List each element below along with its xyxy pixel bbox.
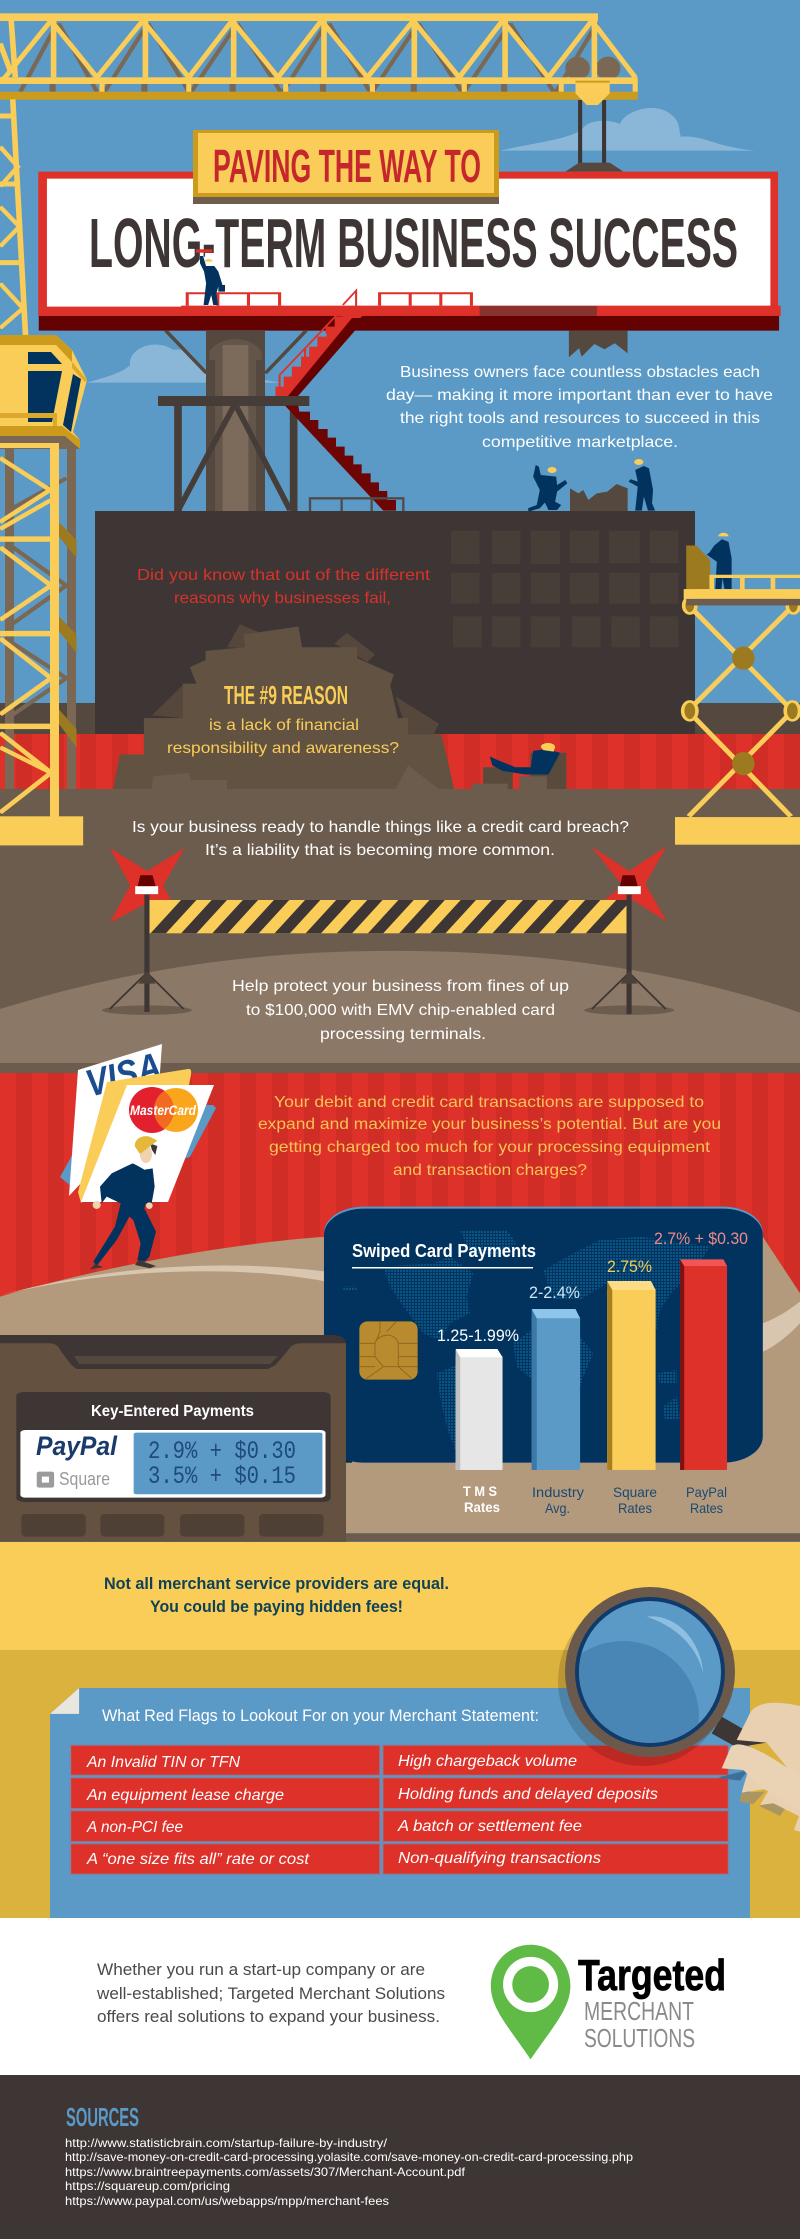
lower stairs <box>285 406 403 511</box>
LCD readout <box>148 1437 296 1491</box>
#9 reason text: responsibility and awareness? <box>167 740 399 757</box>
#9 reason text <box>167 717 399 757</box>
label: paypal <box>686 1484 727 1516</box>
intro text: the right tools and resources to succeed in this <box>400 410 760 427</box>
label: square <box>613 1484 657 1516</box>
chip <box>359 1321 418 1380</box>
EMV text: to $100,000 with EMV chip-enabled card <box>246 1002 555 1019</box>
blue card <box>60 1105 216 1187</box>
transaction text: Your debit and credit card transactions are supposed to <box>274 1094 704 1111</box>
visa logo: VISA <box>81 1045 166 1106</box>
sources list: https://www.braintreepayments.com/assets/307/Merchant-Account.pdf <box>65 2165 466 2179</box>
sources list: https://www.paypal.com/us/webapps/mpp/merchant-fees <box>65 2194 389 2208</box>
hidden fees text: You could be paying hidden fees! <box>150 1597 403 1616</box>
rubble pile <box>113 624 454 789</box>
lift railing <box>712 576 800 589</box>
intro text: day— making it more important than ever to have <box>386 387 773 404</box>
warning flash right <box>591 846 667 922</box>
label: TMS <box>463 1483 500 1515</box>
building <box>95 511 695 735</box>
rooftop rubble <box>570 484 628 511</box>
cloud: right <box>500 108 755 151</box>
billboard white panel <box>47 179 770 307</box>
transaction text: and transaction charges? <box>393 1162 587 1179</box>
statement heading: What Red Flags to Lookout For on your Merchant Statement: <box>102 1707 539 1725</box>
ground <box>0 789 800 1064</box>
sources heading: SOURCES <box>66 2102 139 2132</box>
title banner <box>193 130 499 204</box>
did you know text: Did you know that out of the different <box>137 567 431 584</box>
world map dots <box>343 1230 710 1450</box>
resting worker <box>472 743 566 789</box>
flags: right column: High chargeback volume <box>398 1753 577 1770</box>
lift worker <box>707 533 732 589</box>
yellow section <box>0 1542 800 1650</box>
sources list: https://squareup.com/pricing <box>65 2179 230 2193</box>
crane upper mast <box>0 99 26 335</box>
yellow card <box>78 1069 191 1203</box>
closing text: well-established; Targeted Merchant Solutions <box>96 1984 445 2003</box>
closing text: offers real solutions to expand your business. <box>97 2007 440 2026</box>
sources list <box>65 2136 633 2208</box>
hand shadows <box>718 1770 788 1816</box>
red curtain background <box>0 1073 800 1533</box>
divider band <box>0 1063 800 1073</box>
label: industry <box>532 1484 584 1516</box>
lens <box>565 1587 735 1757</box>
label: paypal: Rates <box>690 1500 723 1516</box>
lift operator cabinet <box>686 545 710 589</box>
flags: left column: A “one size fits all” rate or cost <box>86 1851 310 1868</box>
ground horizon strip <box>0 703 800 737</box>
lens shadow <box>558 1596 728 1766</box>
striped bar <box>149 900 632 933</box>
terminal screen <box>16 1392 331 1502</box>
#9 reason text: is a lack of financial <box>209 717 359 734</box>
worker: standing with tool <box>629 459 655 511</box>
building windows <box>451 531 679 647</box>
tan hill <box>0 1237 800 1542</box>
flags: left column: A non-PCI fee <box>86 1819 183 1836</box>
flags: right column <box>397 1753 658 1867</box>
logo wordmark <box>578 1951 726 2053</box>
statement paper <box>50 1688 750 1918</box>
warning flash left <box>110 848 185 923</box>
billboard deck <box>181 306 781 316</box>
billboard frame <box>38 172 778 315</box>
support braces <box>166 331 306 373</box>
logo wordmark: MERCHANT <box>584 1996 694 2026</box>
paypal logo: PayPal <box>36 1431 117 1461</box>
white footer section <box>0 1918 800 2075</box>
value: paypal: 2.7% + $0.30 <box>654 1229 748 1248</box>
bar: square <box>607 1281 656 1470</box>
terminal buttons <box>21 1514 323 1537</box>
closing text <box>96 1960 445 2026</box>
swiped card payments heading: Swiped Card Payments <box>352 1241 536 1261</box>
magnifying glass and hand <box>547 1587 800 1832</box>
card terminal <box>0 1335 346 1542</box>
transaction text: getting charged too much for your processing equipment <box>269 1139 711 1156</box>
EMV text: Help protect your business from fines of up <box>232 978 569 995</box>
closing text: Whether you run a start-up company or are <box>97 1960 425 1979</box>
crane hook and cables <box>565 81 623 172</box>
white mastercard card <box>81 1085 214 1202</box>
scissor lift <box>675 533 800 845</box>
darker yellow section <box>0 1650 800 1918</box>
barrier <box>102 846 674 1015</box>
support pillar and scaffolding <box>158 331 309 512</box>
crane boom <box>0 13 638 100</box>
title line 1: PAVING THE WAY TO <box>213 140 481 192</box>
LCD readout: 3.5% + $0.15 <box>148 1462 296 1491</box>
stairs <box>276 291 403 511</box>
boom shadow struts <box>20 23 597 92</box>
painter <box>196 249 225 305</box>
intro text: Business owners face countless obstacles each <box>400 364 760 381</box>
mastercard logo <box>129 1087 198 1133</box>
deck railings <box>187 293 471 306</box>
hill <box>0 951 800 1064</box>
mastercard wordmark: MasterCard <box>130 1102 196 1118</box>
flags: left column: An Invalid TIN or TFN <box>86 1754 240 1771</box>
red striped band <box>0 734 800 790</box>
visa card <box>69 1044 162 1196</box>
upper stairs <box>276 291 363 396</box>
label: paypal: PayPal <box>686 1484 727 1500</box>
label: square: Rates <box>618 1500 652 1516</box>
label: TMS: T M S <box>463 1483 497 1499</box>
EMV text: processing terminals. <box>320 1026 486 1043</box>
intro text <box>386 364 773 451</box>
sources list: http://www.statisticbrain.com/startup-failure-by-industry/ <box>65 2136 388 2150</box>
sources list: http://save-money-on-credit-card-processing.yolasite.com/save-money-on-credit-card-processing.php <box>65 2150 633 2164</box>
did you know text: reasons why businesses fail, <box>174 590 391 607</box>
hidden fees text: Not all merchant service providers are equal. <box>104 1574 449 1593</box>
transaction text: expand and maximize your business’s potential. But are you <box>258 1116 721 1133</box>
hanging broken panel <box>569 331 628 357</box>
value: industry: 2-2.4% <box>529 1283 580 1302</box>
square icon <box>37 1472 54 1488</box>
key-entered heading: Key-Entered Payments <box>91 1403 254 1420</box>
flags: left column <box>86 1754 310 1868</box>
breach question text: It’s a liability that is becoming more common. <box>205 842 555 859</box>
value: TMS: 1.25-1.99% <box>437 1326 519 1345</box>
hidden fees text <box>104 1574 449 1616</box>
breach question text <box>132 819 629 859</box>
flags: right column: A batch or settlement fee <box>397 1818 582 1835</box>
hand <box>722 1703 800 1832</box>
handle <box>712 1717 767 1747</box>
intro text: competitive marketplace. <box>482 434 678 451</box>
LCD readout: 2.9% + $0.30 <box>148 1437 296 1466</box>
label: industry: Avg. <box>545 1500 570 1516</box>
flags: right column: Non-qualifying transactions <box>398 1850 601 1867</box>
flags: right column: Holding funds and delayed deposits <box>398 1786 658 1803</box>
sky background <box>0 0 800 790</box>
bar: TMS <box>456 1349 503 1470</box>
billboard <box>38 172 781 331</box>
logo pin <box>491 1945 570 2059</box>
breach question text: Is your business ready to handle things like a credit card breach? <box>132 819 629 836</box>
bar: paypal <box>680 1259 727 1470</box>
label: square: Square <box>613 1484 657 1500</box>
label: TMS: Rates <box>464 1499 500 1515</box>
did you know text <box>137 567 431 607</box>
credit card <box>324 1207 763 1463</box>
worker: kneeling with hammer <box>528 465 567 512</box>
workers on roof <box>528 459 655 512</box>
transaction text <box>258 1094 721 1179</box>
square logo: Square <box>59 1469 110 1489</box>
bar: industry average <box>532 1309 580 1470</box>
EMV text <box>232 978 569 1043</box>
logo wordmark: SOLUTIONS <box>584 2023 695 2053</box>
man carrying cards <box>90 1136 157 1269</box>
value: square: 2.75% <box>607 1257 652 1276</box>
bar chart <box>437 1229 748 1516</box>
flags: left column: An equipment lease charge <box>86 1787 284 1804</box>
cloud: left <box>87 344 281 383</box>
label: industry: Industry <box>532 1484 584 1500</box>
lower crane tower <box>0 443 83 845</box>
crane cab <box>0 335 87 449</box>
logo wordmark: Targeted <box>578 1951 726 2000</box>
#9 reason heading: THE #9 REASON <box>224 680 348 710</box>
sources section <box>0 2075 800 2239</box>
table of flags <box>70 1745 729 1874</box>
